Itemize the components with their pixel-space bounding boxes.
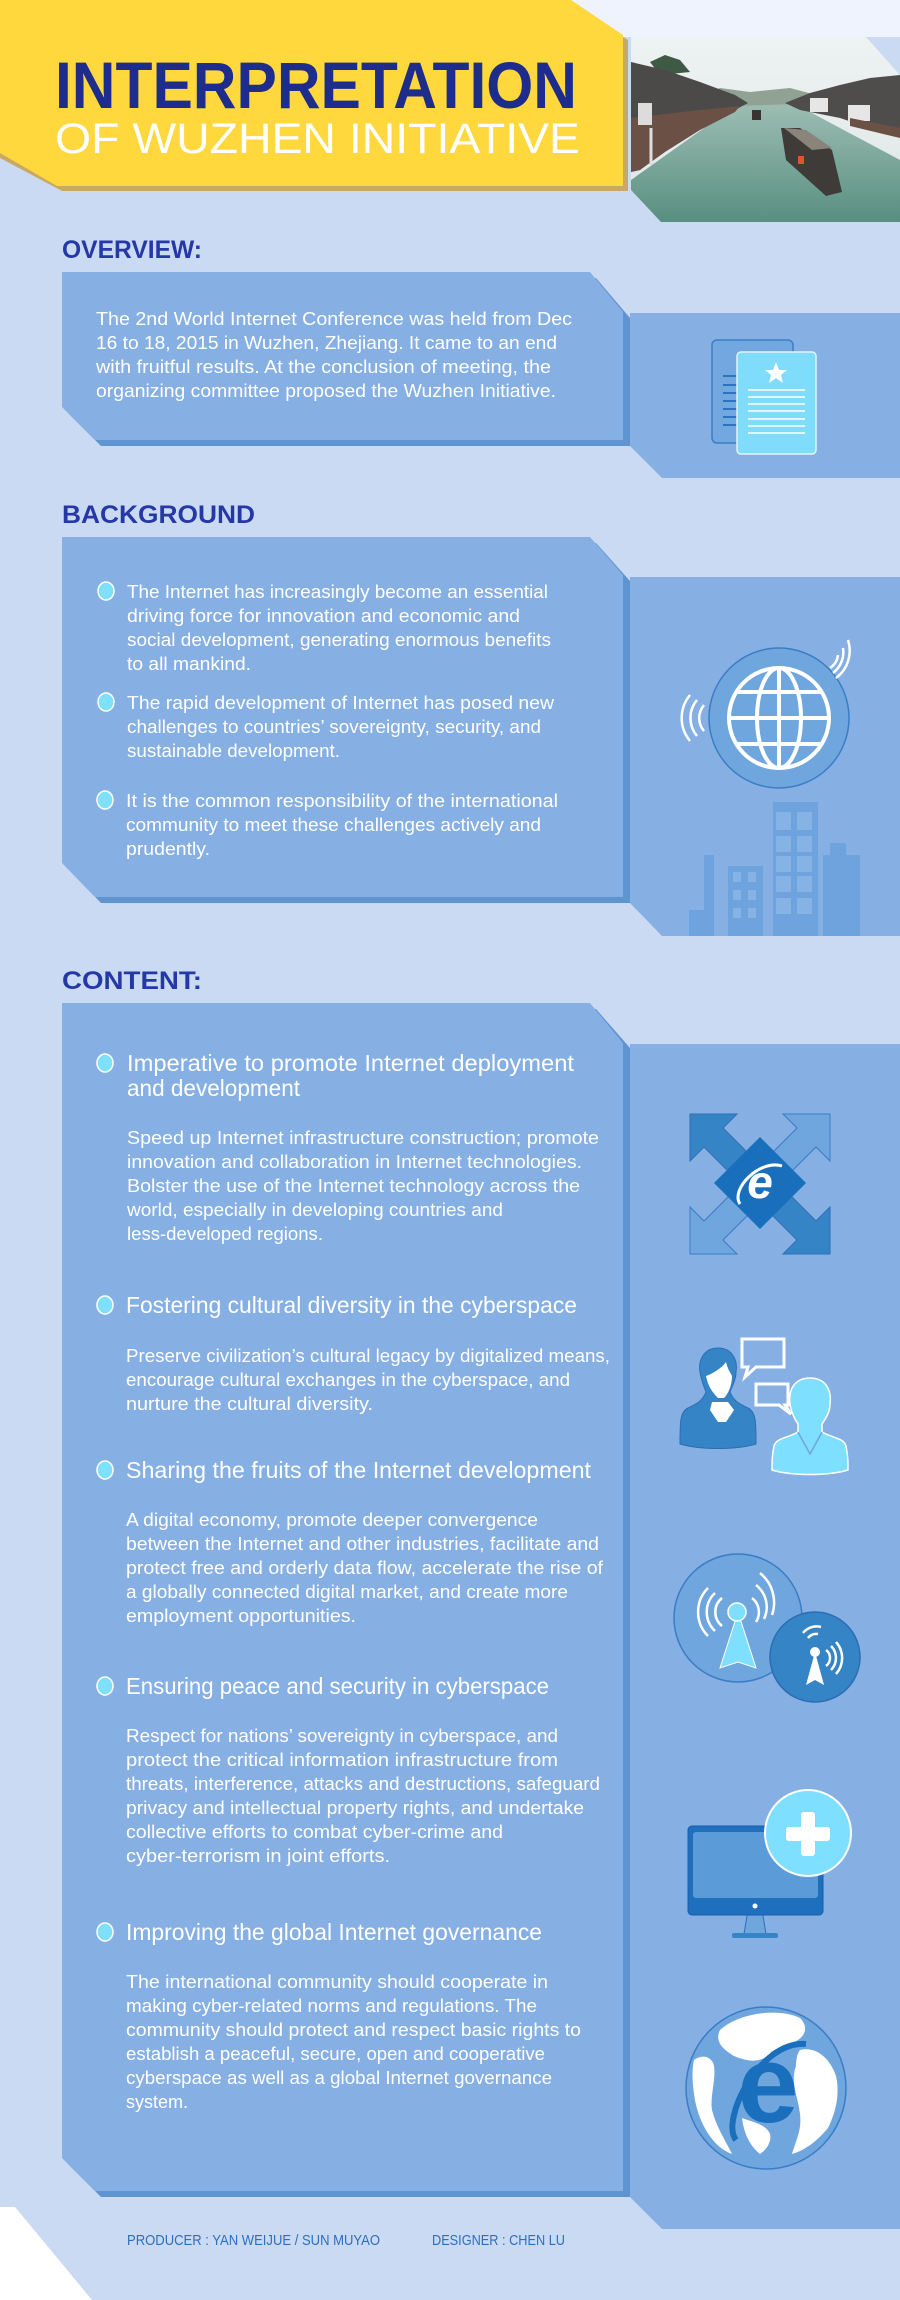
- item 5: community should protect and respect basic rights to: [126, 2019, 581, 2040]
- bullet 2: The rapid development of Internet has posed new: [127, 692, 555, 713]
- panel: background: [62, 537, 900, 936]
- item 4: privacy and intellectual property rights, and undertake: [126, 1797, 584, 1818]
- bullet 3: community to meet these challenges actively and: [126, 814, 541, 835]
- icon: documents: [712, 340, 816, 454]
- icon: globe with e: e: [737, 2023, 799, 2146]
- item 3: employment opportunities.: [126, 1605, 356, 1626]
- overview text: [95, 308, 572, 401]
- icon: people talking: [680, 1339, 848, 1474]
- item 3: between the Internet and other industries, facilitate and: [126, 1533, 599, 1554]
- item 4: threats, interference, attacks and destructions, safeguard: [126, 1773, 600, 1794]
- item 5: Improving the global Internet governance: [126, 1919, 542, 1945]
- bullet 2: [98, 692, 555, 761]
- title banner: [0, 0, 628, 191]
- bullet 1: social development, generating enormous benefits: [127, 629, 551, 650]
- icon: antennas: [674, 1554, 860, 1702]
- icon: buildings: [689, 802, 860, 936]
- bullet 3: [97, 790, 558, 859]
- icon: globe with e: [686, 2007, 846, 2169]
- heading: overview: OVERVIEW:: [62, 236, 202, 264]
- bullet 1: driving force for innovation and economic and: [127, 605, 520, 626]
- item 2: [97, 1292, 610, 1414]
- item 4: Ensuring peace and security in cyberspace: [126, 1673, 549, 1699]
- item 1: less-developed regions.: [127, 1223, 323, 1244]
- item 1: Imperative to promote Internet deployment: [127, 1050, 575, 1076]
- footer credits: [127, 2232, 565, 2249]
- item 2: encourage cultural exchanges in the cyberspace, and: [126, 1369, 570, 1390]
- panel: overview: [62, 272, 900, 478]
- item 2: nurture the cultural diversity.: [126, 1393, 373, 1414]
- item 5: system.: [126, 2091, 188, 2112]
- item 1: and development: [127, 1075, 301, 1101]
- icon: monitor with plus: [688, 1790, 851, 1938]
- item 1: Bolster the use of the Internet technology across the: [127, 1175, 580, 1196]
- panel: content: [62, 1003, 900, 2229]
- bullet 2: challenges to countries’ sovereignty, security, and: [127, 716, 541, 737]
- footer credits: DESIGNER : CHEN LU: [432, 2232, 565, 2249]
- item 3: Sharing the fruits of the Internet development: [126, 1457, 592, 1483]
- item 5: [97, 1919, 581, 2112]
- item 1: Speed up Internet infrastructure construction; promote: [127, 1127, 599, 1148]
- icon: expanding arrows with e: [690, 1114, 830, 1254]
- icon: expanding arrows with e: e: [747, 1156, 773, 1208]
- item 4: [97, 1673, 600, 1866]
- item 4: cyber-terrorism in joint efforts.: [126, 1845, 390, 1866]
- item 3: [97, 1457, 604, 1626]
- bullet 3: It is the common responsibility of the international: [126, 790, 558, 811]
- item 1: innovation and collaboration in Internet technologies.: [127, 1151, 582, 1172]
- bullet 1: [98, 581, 551, 674]
- overview text: with fruitful results. At the conclusion of meeting, the: [95, 356, 551, 377]
- bullet 3: prudently.: [126, 838, 210, 859]
- bullet 1: The Internet has increasingly become an essential: [127, 581, 548, 602]
- photo: Wuzhen canal: [631, 37, 900, 222]
- overview text: The 2nd World Internet Conference was held from Dec: [96, 308, 572, 329]
- title: line 2: OF WUZHEN INITIATIVE: [55, 115, 580, 163]
- item 5: making cyber-related norms and regulations. The: [126, 1995, 537, 2016]
- bullet 2: sustainable development.: [127, 740, 340, 761]
- item 1: world, especially in developing countries and: [126, 1199, 503, 1220]
- item 5: establish a peaceful, secure, open and cooperative: [126, 2043, 545, 2064]
- title: line 1: INTERPRETATION: [55, 48, 577, 122]
- overview text: 16 to 18, 2015 in Wuzhen, Zhejiang. It came to an end: [96, 332, 557, 353]
- item 3: A digital economy, promote deeper convergence: [126, 1509, 538, 1530]
- item 5: cyberspace as well as a global Internet governance: [126, 2067, 552, 2088]
- item 4: collective efforts to combat cyber-crime and: [126, 1821, 503, 1842]
- item 3: a globally connected digital market, and create more: [126, 1581, 568, 1602]
- footer credits: PRODUCER : YAN WEIJUE / SUN MUYAO: [127, 2232, 380, 2249]
- item 1: [97, 1050, 599, 1244]
- heading: background: BACKGROUND: [62, 501, 255, 529]
- item 3: protect free and orderly data flow, accelerate the rise of: [126, 1557, 604, 1578]
- item 2: Fostering cultural diversity in the cyberspace: [126, 1292, 577, 1318]
- item 2: Preserve civilization’s cultural legacy by digitalized means,: [126, 1345, 610, 1366]
- icon: globe with signal: [682, 640, 850, 788]
- heading: content: CONTENT:: [62, 967, 202, 995]
- item 4: Respect for nations’ sovereignty in cyberspace, and: [126, 1725, 558, 1746]
- overview text: organizing committee proposed the Wuzhen Initiative.: [96, 380, 556, 401]
- item 5: The international community should cooperate in: [126, 1971, 548, 1992]
- item 4: protect the critical information infrastructure from: [126, 1749, 558, 1770]
- bullet 1: to all mankind.: [127, 653, 251, 674]
